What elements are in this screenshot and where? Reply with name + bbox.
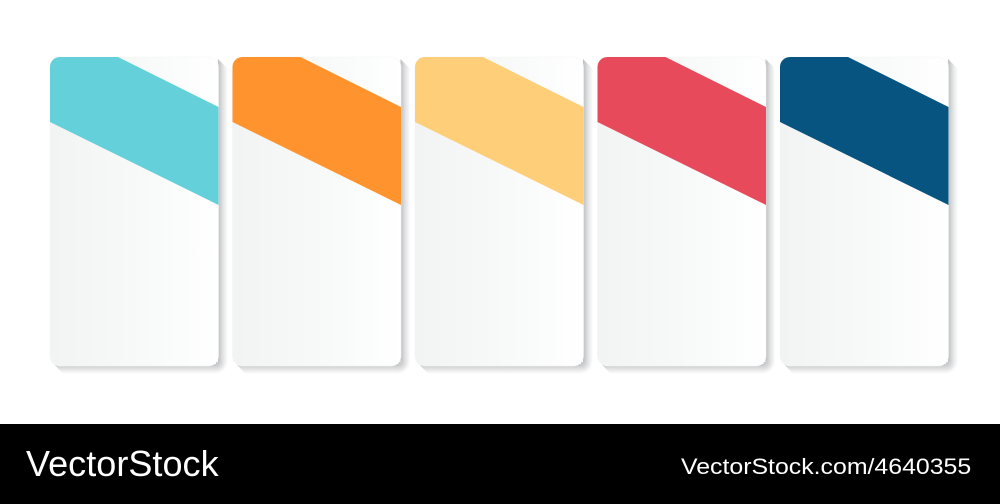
teal diagonal band xyxy=(40,57,218,205)
card set xyxy=(50,57,956,372)
image url text: VectorStock.com/4640355 xyxy=(681,454,971,479)
yellow diagonal band xyxy=(405,57,584,205)
footer bar xyxy=(0,424,1000,504)
card 2: orange xyxy=(222,57,410,374)
navy diagonal band xyxy=(770,57,948,205)
card 3: yellow xyxy=(405,57,593,374)
red diagonal band xyxy=(588,57,766,205)
card 1: teal xyxy=(40,57,228,374)
orange diagonal band xyxy=(222,57,401,205)
card 5: navy xyxy=(770,57,958,374)
brand logo text: VectorStock xyxy=(26,443,219,484)
card 4: red xyxy=(588,57,776,374)
